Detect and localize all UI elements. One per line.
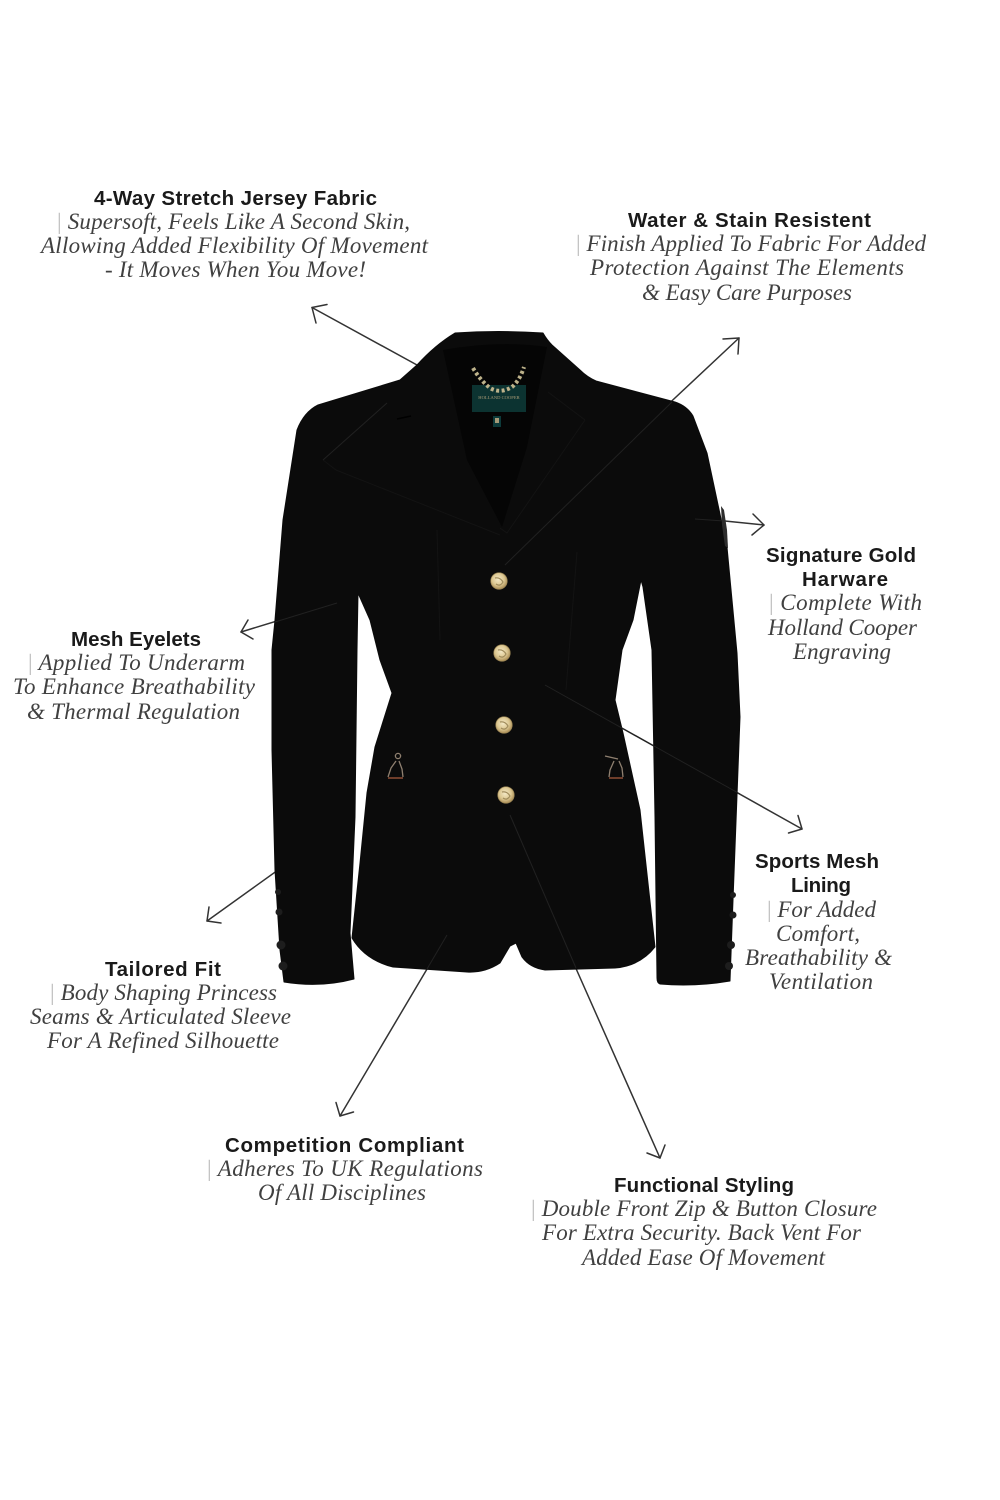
arrow: functional styling bbox=[570, 955, 665, 1158]
lapel seams bbox=[323, 392, 585, 690]
heading: Tailored Fit bbox=[105, 958, 221, 981]
description: Holland Cooper bbox=[767, 615, 918, 640]
sleeve hardware patch bbox=[721, 506, 728, 548]
heading bbox=[755, 850, 879, 897]
callout: competition compliant bbox=[207, 1134, 483, 1205]
description bbox=[30, 980, 291, 1053]
description bbox=[531, 1196, 877, 1270]
description: Comfort, bbox=[776, 921, 860, 946]
callout: sports mesh lining bbox=[745, 850, 892, 994]
heading: Competition Compliant bbox=[225, 1134, 464, 1157]
description bbox=[745, 897, 892, 994]
description: & Easy Care Purposes bbox=[642, 280, 852, 305]
description: To Enhance Breathability bbox=[13, 674, 256, 699]
size tag bbox=[493, 416, 501, 427]
description bbox=[767, 590, 922, 664]
left stirrup zip pull bbox=[388, 753, 403, 778]
description: Of All Disciplines bbox=[258, 1180, 426, 1205]
heading: Lining bbox=[791, 874, 851, 897]
description bbox=[576, 231, 926, 305]
description: Ventilation bbox=[769, 969, 873, 994]
callout: tailored fit bbox=[30, 958, 291, 1053]
description: & Thermal Regulation bbox=[27, 699, 240, 724]
description: | Complete With bbox=[769, 590, 922, 615]
description: Seams & Articulated Sleeve bbox=[30, 1004, 291, 1029]
description: | Applied To Underarm bbox=[28, 650, 245, 675]
description: For A Refined Silhouette bbox=[46, 1028, 279, 1053]
arrow: competition compliant bbox=[336, 964, 430, 1116]
description: | Finish Applied To Fabric For Added bbox=[576, 231, 926, 256]
callout: 4-way stretch jersey fabric bbox=[39, 187, 429, 282]
heading: Functional Styling bbox=[614, 1174, 794, 1197]
description: Protection Against The Elements bbox=[589, 255, 904, 280]
heading: Water & Stain Resistent bbox=[628, 209, 871, 232]
heading: Signature Gold bbox=[766, 544, 916, 567]
description: Engraving bbox=[792, 639, 891, 664]
brand label: HOLLAND COOPER bbox=[478, 395, 521, 400]
description: Allowing Added Flexibility Of Movement bbox=[39, 233, 429, 258]
description bbox=[207, 1156, 483, 1205]
arrow: tailored fit bbox=[207, 865, 285, 923]
description: | For Added bbox=[767, 897, 876, 922]
heading: Sports Mesh bbox=[755, 850, 879, 873]
jacket silhouette bbox=[272, 332, 740, 985]
description: | Body Shaping Princess bbox=[50, 980, 277, 1005]
heading: 4-Way Stretch Jersey Fabric bbox=[94, 187, 377, 210]
description bbox=[13, 650, 256, 724]
heading: Harware bbox=[802, 568, 888, 591]
brand label bbox=[472, 385, 526, 412]
cuff buttons right bbox=[725, 892, 736, 970]
arrow: stretch fabric bbox=[312, 304, 417, 365]
arrow lines ghosted over jacket bbox=[275, 402, 740, 969]
description: - It Moves When You Move! bbox=[105, 257, 366, 282]
heading bbox=[766, 544, 916, 591]
gold buttons bbox=[491, 573, 514, 803]
arrow: mesh eyelets bbox=[241, 617, 290, 639]
arrow: sports mesh lining bbox=[620, 727, 802, 833]
description: Added Ease Of Movement bbox=[580, 1245, 826, 1270]
description: | Adheres To UK Regulations bbox=[207, 1156, 483, 1181]
arrow: water and stain bbox=[660, 338, 739, 412]
callout: mesh eyelets bbox=[13, 628, 256, 724]
heading: Mesh Eyelets bbox=[71, 628, 201, 651]
gold chain bbox=[473, 367, 524, 391]
description bbox=[39, 209, 429, 282]
description: Breathability & bbox=[745, 945, 892, 970]
jacket illustration bbox=[272, 332, 740, 985]
description: | Supersoft, Feels Like A Second Skin, bbox=[57, 209, 410, 234]
cuff buttons left bbox=[275, 889, 288, 970]
callout: signature gold hardware bbox=[766, 544, 922, 664]
right stirrup zip pull bbox=[605, 756, 623, 778]
arrow: signature hardware bbox=[715, 514, 764, 535]
description: | Double Front Zip & Button Closure bbox=[531, 1196, 877, 1221]
description: For Extra Security. Back Vent For bbox=[541, 1220, 862, 1245]
callout: water and stain resistent bbox=[576, 209, 926, 305]
inner lining bbox=[443, 344, 547, 527]
callout: functional styling bbox=[531, 1174, 877, 1270]
